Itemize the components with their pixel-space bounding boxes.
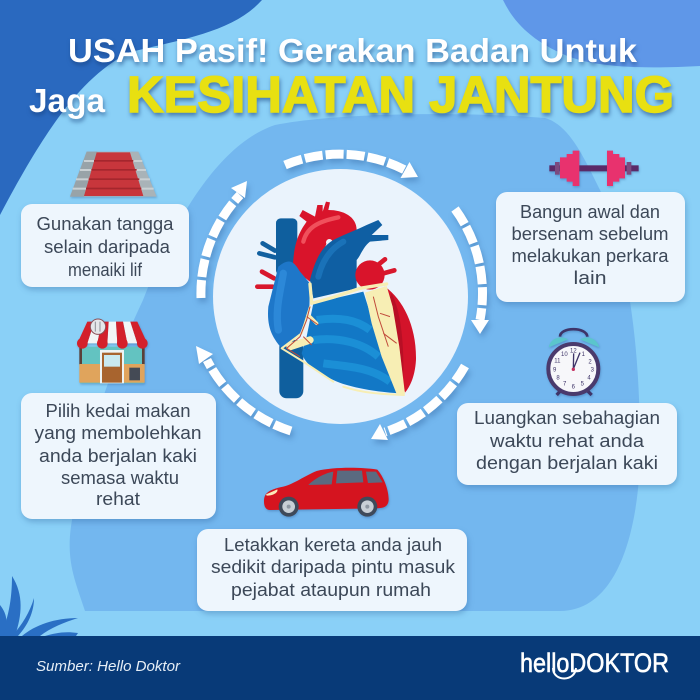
icon: stairs	[70, 152, 157, 197]
card: morning exercise tip: melakukan perkara	[512, 246, 669, 266]
card: stairs tip	[21, 204, 189, 287]
title: KESIHATAN JANTUNG	[127, 66, 674, 123]
cycle arrows	[196, 154, 489, 440]
central circle	[213, 169, 468, 424]
icon: alarm clock: 2	[588, 359, 592, 365]
icon: alarm clock: 10	[561, 352, 568, 358]
icon: alarm clock: 7	[563, 381, 567, 387]
title: Jaga	[29, 82, 106, 119]
card: walking break tip: waktu rehat anda	[489, 431, 645, 451]
card: parking tip	[197, 529, 467, 611]
card: restaurant tip: yang membolehkan	[34, 423, 202, 443]
icon: alarm clock: 3	[591, 367, 595, 373]
card: parking tip: Letakkan kereta anda jauh	[224, 535, 442, 555]
card: stairs tip: Gunakan tangga	[36, 214, 175, 234]
fat band on ventricle	[365, 286, 405, 394]
title	[29, 32, 674, 123]
icon: alarm clock: 4	[587, 375, 591, 381]
source text: Sumber: Hello Doktor	[36, 658, 181, 675]
card: morning exercise tip: bersenam sebelum	[512, 224, 668, 244]
icon: alarm clock: 11	[554, 359, 561, 365]
logo: helloDOKTOR	[520, 648, 669, 678]
card: morning exercise tip: lain	[574, 268, 606, 288]
card: parking tip: pejabat ataupun rumah	[231, 580, 431, 600]
title: USAH Pasif! Gerakan Badan Untuk	[68, 32, 638, 69]
icon: car	[264, 468, 389, 517]
card: parking tip: sedikit daripada pintu masuk	[211, 557, 456, 577]
card: stairs tip: selain daripada	[44, 237, 171, 257]
card: walking break tip	[457, 403, 677, 485]
icon: alarm clock: 12	[570, 349, 577, 355]
icon: alarm clock: 5	[581, 381, 585, 387]
icon: shop	[77, 319, 148, 383]
card: restaurant tip: anda berjalan kaki	[39, 446, 197, 466]
card: walking break tip: dengan berjalan kaki	[476, 453, 658, 473]
icon: alarm clock: 8	[556, 375, 560, 381]
icon: alarm clock	[548, 329, 599, 395]
card: morning exercise tip	[496, 192, 685, 302]
card: restaurant tip	[21, 393, 216, 519]
card: restaurant tip: semasa waktu	[61, 468, 179, 488]
card: walking break tip: Luangkan sebahagian	[474, 408, 660, 428]
card: restaurant tip: rehat	[96, 489, 140, 509]
icon: alarm clock: 6	[572, 385, 576, 391]
footer bar	[0, 636, 700, 700]
icon: dumbbell	[549, 151, 639, 186]
icon: alarm clock: 1	[582, 352, 586, 358]
card: morning exercise tip: Bangun awal dan	[520, 202, 660, 222]
icon: palm leaves	[0, 576, 78, 636]
card: stairs tip: menaiki lif	[68, 260, 143, 280]
icon: heart	[257, 202, 416, 398]
card: restaurant tip: Pilih kedai makan	[46, 401, 191, 421]
icon: alarm clock: 9	[553, 367, 557, 373]
